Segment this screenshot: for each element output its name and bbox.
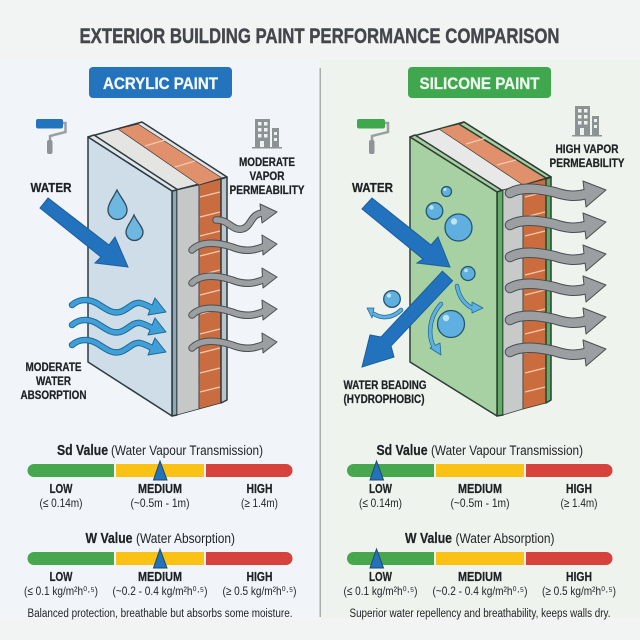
icon: blue paint roller — [36, 119, 66, 154]
labels: W scale: MEDIUM — [458, 570, 502, 584]
icon: water drops — [108, 190, 143, 240]
icon: water beads — [384, 186, 475, 338]
label: water beading — [344, 378, 426, 406]
heading: W value: (Water Absorption) — [136, 531, 235, 546]
arrow: water — [40, 198, 128, 267]
summary: acrylic: Balanced protection, breathable but absorbs some moisture. — [28, 608, 292, 620]
panel: acrylic paint — [20, 67, 304, 416]
labels: Sd scale: MEDIUM — [458, 482, 502, 496]
label: moderate water absorption: WATER — [36, 374, 71, 388]
label: high vapor permeability — [550, 142, 624, 170]
panel: silicone ratings — [344, 443, 616, 620]
scale bar: W — [347, 549, 612, 568]
scale bar: Sd — [28, 461, 293, 480]
label: water beading: WATER BEADING — [344, 378, 426, 392]
label: water beading: (HYDROPHOBIC) — [344, 392, 425, 406]
arrows: vapor — [192, 204, 277, 353]
labels: Sd scale: LOW — [369, 482, 392, 496]
arrows: bead run-off — [367, 286, 483, 355]
labels: W scale: HIGH — [566, 570, 592, 584]
labels: Sd scale — [40, 482, 278, 510]
labels: W scale: (~0.2 - 0.4 kg/m²h⁰·⁵) — [432, 584, 528, 598]
heading: W value: (Water Absorption) — [456, 531, 554, 546]
scale bar: Sd — [347, 461, 612, 480]
labels: Sd scale: (≤ 0.14m) — [359, 496, 402, 510]
label: water: WATER — [30, 180, 72, 195]
label: moderate vapor permeability: PERMEABILITY — [230, 183, 304, 197]
arrow: water incoming — [362, 198, 450, 267]
arrow: water deflected — [362, 271, 453, 367]
scale bar: W — [28, 549, 293, 568]
heading: acrylic paint — [89, 67, 232, 98]
heading: Sd value — [57, 443, 263, 459]
marker: medium — [154, 549, 167, 568]
labels: W scale: (~0.2 - 0.4 kg/m²h⁰·⁵) — [112, 584, 208, 598]
labels: W scale: (≤ 0.1 kg/m²h⁰·⁵) — [344, 584, 418, 598]
labels: Sd scale: HIGH — [566, 482, 592, 496]
heading: Sd value: Sd Value — [376, 443, 428, 459]
icon: building — [572, 106, 602, 136]
icon: green paint roller — [357, 119, 388, 154]
labels: Sd scale: HIGH — [246, 482, 272, 496]
labels: Sd scale: (~0.5m - 1m) — [130, 496, 190, 510]
heading: Sd value: Sd Value — [57, 443, 108, 459]
icon: building — [252, 119, 282, 148]
labels: W scale: LOW — [369, 570, 392, 584]
label: water: WATER — [352, 180, 394, 195]
labels: W scale: (≥ 0.5 kg/m²h⁰·⁵) — [222, 584, 296, 598]
arrows: water absorption waves — [72, 298, 166, 355]
labels: W scale — [344, 570, 616, 598]
heading: Sd value — [376, 443, 583, 459]
labels: W scale: LOW — [50, 570, 73, 584]
label: high vapor permeability: HIGH VAPOR — [556, 142, 619, 156]
marker: low — [370, 549, 384, 568]
marker: low — [370, 461, 384, 480]
labels: Sd scale: (≥ 1.4m) — [241, 496, 278, 510]
heading: W value: W Value — [405, 531, 452, 547]
label: high vapor permeability: PERMEABILITY — [550, 156, 624, 170]
wall cross-section — [88, 122, 227, 416]
labels: W scale: (≤ 0.1 kg/m²h⁰·⁵) — [24, 584, 98, 598]
labels: W scale: HIGH — [246, 570, 272, 584]
labels: W scale — [24, 570, 296, 598]
label: moderate water absorption — [20, 360, 86, 402]
heading: silicone paint — [408, 67, 551, 98]
labels: Sd scale: LOW — [50, 482, 73, 496]
heading: silicone paint: SILICONE PAINT — [420, 74, 540, 93]
labels: Sd scale: (~0.5m - 1m) — [450, 496, 510, 510]
label: moderate vapor permeability: MODERATE — [239, 155, 295, 169]
labels: W scale: (≥ 0.5 kg/m²h⁰·⁵) — [542, 584, 616, 598]
labels: Sd scale: (≥ 1.4m) — [560, 496, 598, 510]
wall cross-section — [410, 122, 551, 416]
heading: acrylic paint: ACRYLIC PAINT — [103, 74, 219, 93]
arrows: vapor — [510, 181, 606, 366]
label: moderate water absorption: ABSORPTION — [20, 388, 86, 402]
labels: Sd scale: (≤ 0.14m) — [40, 496, 83, 510]
heading: W value — [86, 531, 235, 547]
labels: W scale: MEDIUM — [138, 570, 182, 584]
panel: silicone paint — [344, 67, 624, 416]
heading: Sd value: (Water Vapour Transmission) — [111, 443, 263, 458]
labels: Sd scale: MEDIUM — [138, 482, 182, 496]
label: moderate vapor permeability: VAPOR — [250, 169, 285, 183]
heading: Sd value: (Water Vapour Transmission) — [431, 443, 583, 458]
label: moderate water absorption: MODERATE — [26, 360, 82, 374]
heading: W value: W Value — [86, 531, 132, 547]
labels: Sd scale — [359, 482, 598, 510]
marker: medium — [154, 461, 167, 480]
heading: W value — [405, 531, 554, 547]
label: moderate vapor permeability — [230, 155, 304, 197]
panel: acrylic ratings — [24, 443, 296, 620]
